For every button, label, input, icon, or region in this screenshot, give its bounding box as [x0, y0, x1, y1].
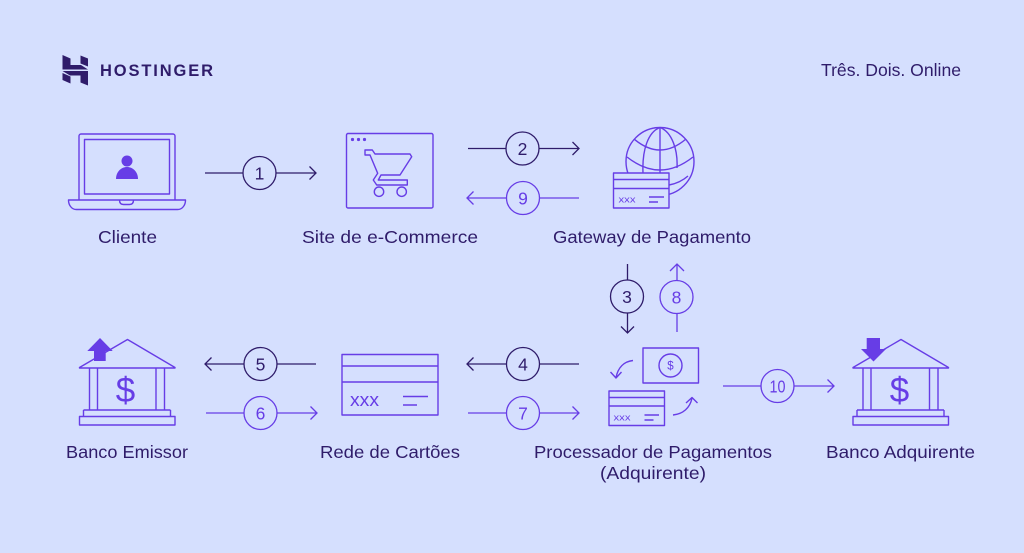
icon: processor with banknote and card — [609, 348, 698, 426]
icon: issuing bank with up arrow — [80, 338, 175, 425]
arrow 6 — [206, 396, 317, 430]
arrow 1: 1 — [255, 164, 264, 184]
icon: Hostinger mark — [62, 55, 88, 86]
icon: card network: xxx — [350, 390, 379, 410]
icon: acquiring bank with down arrow: $ — [890, 371, 909, 410]
label: Banco Adquirente: Banco Adquirente — [826, 442, 975, 462]
arrow 10: 10 — [770, 376, 786, 396]
arrow 2: 2 — [518, 139, 527, 159]
arrow 9: 9 — [518, 188, 528, 208]
label: Rede de Cartões: Rede de Cartões — [320, 442, 460, 462]
arrow 7 — [468, 396, 579, 430]
label: Processador de Pagamentos (Adquirente): Processador de Pagamentos — [534, 442, 772, 462]
arrow 3: 3 — [622, 287, 632, 307]
icon: card network — [342, 354, 438, 415]
label: Gateway de Pagamento: Gateway de Pagamento — [553, 227, 751, 247]
icon: processor with banknote and card: $ — [667, 360, 674, 372]
arrow 7: 7 — [518, 404, 528, 424]
icon: acquiring bank with down arrow — [853, 338, 948, 425]
arrow 4: 4 — [518, 354, 528, 374]
label: Banco Emissor: Banco Emissor — [66, 442, 188, 462]
label: Processador de Pagamentos (Adquirente): (Adquirente) — [600, 463, 706, 483]
arrow 8 — [660, 264, 693, 332]
tagline: Três. Dois. Online — [821, 60, 961, 80]
icon: globe with card: xxx — [618, 194, 636, 204]
arrow 1 — [205, 156, 316, 190]
arrow 2 — [468, 132, 579, 165]
label: Cliente: Cliente — [98, 227, 157, 247]
arrow 8: 8 — [672, 288, 681, 308]
label: Site de e-Commerce: Site de e-Commerce — [302, 227, 478, 247]
arrow 6: 6 — [256, 404, 265, 424]
icon: laptop with user — [68, 134, 186, 210]
icon: issuing bank with up arrow: $ — [116, 371, 135, 410]
arrow 3 — [610, 264, 644, 333]
logo: Hostinger — [62, 55, 213, 86]
icon: processor with banknote and card: xxx — [614, 412, 631, 422]
arrow 5 — [205, 348, 316, 380]
arrow 5: 5 — [256, 354, 265, 374]
icon: globe with card — [614, 128, 694, 208]
label: Processador de Pagamentos (Adquirente) — [534, 442, 772, 483]
arrow 4 — [467, 348, 579, 380]
arrow 10 — [723, 370, 834, 402]
wordmark: HOSTINGER — [100, 62, 213, 80]
icon: e-commerce window with cart — [346, 134, 433, 208]
arrow 9 — [467, 182, 579, 214]
